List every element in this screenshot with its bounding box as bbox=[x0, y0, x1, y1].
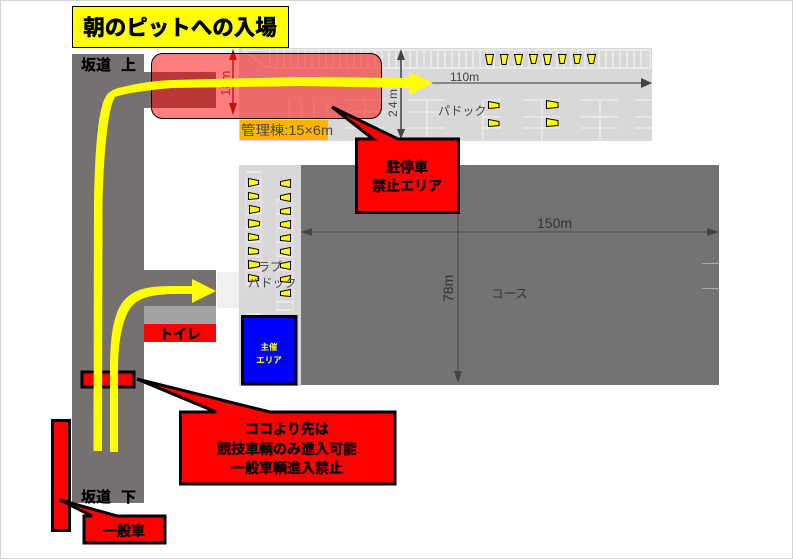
organiser area bbox=[242, 316, 296, 384]
title: 朝のピットへの入場 bbox=[83, 11, 277, 42]
dimension: 18m: 18m bbox=[218, 71, 233, 96]
dimension: 110m: 110m bbox=[450, 70, 479, 84]
arrow: second route bbox=[110, 279, 216, 452]
toilet building: トイレ bbox=[159, 324, 201, 344]
label: slope bottom: 下 bbox=[121, 486, 136, 507]
label: slope top: 坂道 bbox=[81, 54, 111, 75]
callout: competition vehicles only bbox=[137, 379, 395, 484]
callout: general vehicles: 一般車 bbox=[103, 521, 145, 541]
callout: no-parking area bbox=[332, 107, 458, 212]
panel: upper paddock bbox=[239, 48, 652, 141]
road: main slope bbox=[72, 54, 216, 503]
title bbox=[72, 6, 288, 48]
entrance area bbox=[217, 272, 239, 308]
cones: paddock bbox=[488, 100, 558, 126]
general vehicle bar bbox=[52, 420, 70, 530]
callout: competition vehicles only: ココより先は bbox=[245, 419, 329, 439]
label: course: コース bbox=[491, 287, 528, 301]
organiser area: エリア bbox=[256, 354, 282, 366]
dimension: 24m: 24m bbox=[386, 89, 400, 117]
no-parking zone bbox=[152, 54, 382, 118]
cones: right column bbox=[280, 180, 290, 296]
panel: course bbox=[301, 165, 719, 385]
label: love paddock: パドック bbox=[248, 276, 296, 290]
label: love paddock: ラブ bbox=[258, 259, 282, 274]
dimension: 24m bbox=[386, 49, 405, 139]
organiser area: 主催 bbox=[260, 341, 278, 353]
toilet building bbox=[144, 306, 216, 344]
label: paddock: パドック bbox=[438, 104, 486, 118]
dimension: 150m bbox=[301, 215, 719, 236]
dimension: 110m bbox=[425, 70, 652, 88]
label: slope bottom: 坂道 bbox=[81, 486, 111, 507]
dimension: 78m bbox=[440, 214, 462, 383]
callout: general vehicles bbox=[60, 500, 165, 543]
cones: left column bbox=[248, 178, 260, 282]
dimension: 150m: 150m bbox=[537, 215, 572, 231]
label: slope top: 上 bbox=[121, 54, 136, 75]
label: slope top bbox=[81, 54, 136, 75]
dimension: 78m: 78m bbox=[440, 275, 456, 302]
label: love paddock bbox=[248, 259, 296, 290]
label: management building bbox=[240, 120, 333, 140]
label: management building: 管理棟:15×6m bbox=[241, 123, 333, 138]
label: slope bottom bbox=[81, 486, 136, 507]
callout: no-parking area: 駐停車 bbox=[386, 157, 428, 177]
callout: competition vehicles only: 一般車輌進入禁止 bbox=[231, 458, 343, 478]
dimension: 18m bbox=[218, 49, 237, 115]
cones: top row bbox=[486, 54, 596, 64]
barrier bbox=[82, 372, 134, 387]
arrow: main route bbox=[94, 72, 433, 451]
callout: no-parking area: 禁止エリア bbox=[372, 176, 442, 196]
callout: competition vehicles only: 競技車輌のみ進入可能 bbox=[217, 439, 357, 459]
panel: lower-left paddock strip bbox=[239, 165, 301, 386]
